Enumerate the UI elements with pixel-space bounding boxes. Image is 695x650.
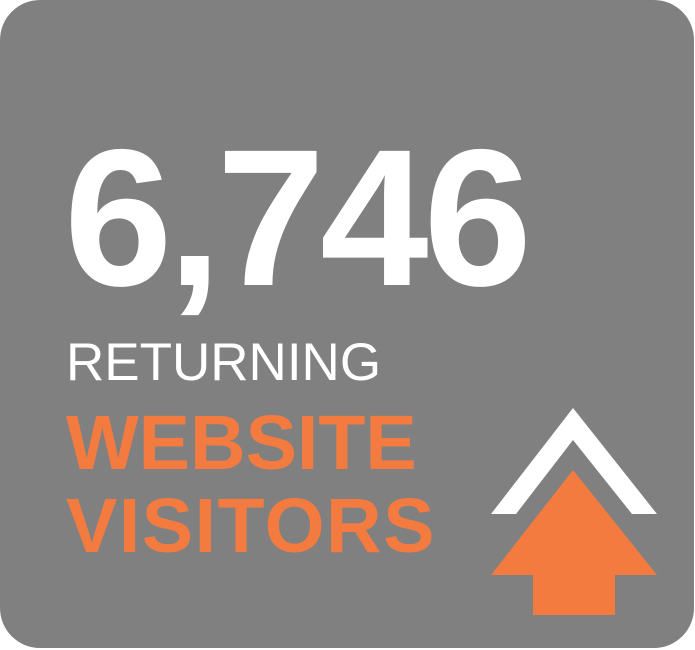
chevron xyxy=(491,408,657,514)
label: visitors: VISITORS xyxy=(66,483,436,569)
orange arrow xyxy=(491,470,657,615)
label: website: WEBSITE xyxy=(66,400,417,486)
label: returning: RETURNING xyxy=(66,333,381,392)
number: 6,746 xyxy=(64,109,527,327)
